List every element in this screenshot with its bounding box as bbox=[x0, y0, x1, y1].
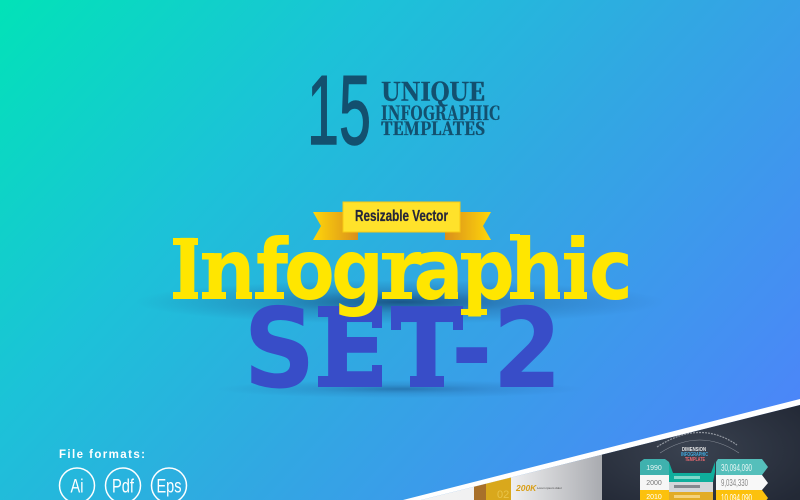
title: set-2: SET-2 bbox=[244, 284, 562, 413]
value 200k: 200K bbox=[515, 483, 537, 493]
year column: 2000 bbox=[646, 480, 662, 487]
ribbon text: Resizable Vector bbox=[355, 208, 448, 225]
white diagonal band bbox=[403, 399, 800, 500]
format badge: pdf: Pdf bbox=[112, 476, 135, 498]
shadow under infographic title bbox=[135, 280, 665, 324]
preview heading bbox=[681, 447, 708, 461]
ribbon centre bbox=[343, 202, 460, 232]
number 15: 15 bbox=[307, 55, 371, 165]
file formats block bbox=[59, 449, 186, 500]
text: templates: TEMPLATES bbox=[381, 115, 485, 141]
preview panel: light bbox=[422, 454, 602, 500]
year column: 1990 bbox=[646, 465, 662, 472]
format badge: eps: Eps bbox=[156, 476, 182, 498]
text: unique: UNIQUE bbox=[381, 74, 485, 108]
shadow under set-2 title bbox=[215, 380, 585, 398]
title: infographic: Infographic bbox=[174, 221, 633, 319]
format badge: ai: Ai bbox=[70, 476, 84, 498]
preview heading: INFOGRAPHIC bbox=[681, 452, 708, 458]
text: infographic: INFOGRAPHIC bbox=[381, 98, 500, 126]
preview panel: dark bbox=[602, 400, 800, 500]
headline: 15 unique infographic templates bbox=[307, 55, 500, 165]
value arrows bbox=[716, 459, 768, 500]
preview heading: DIMENSION bbox=[682, 447, 706, 453]
arc caption bbox=[657, 432, 739, 453]
file formats label: File formats: bbox=[59, 449, 145, 461]
ribbon right tail bbox=[445, 212, 491, 240]
preview heading: TEMPLATE bbox=[685, 457, 705, 463]
ribbon badge bbox=[313, 202, 491, 240]
small caption: Lorem ipsum dolor bbox=[537, 486, 562, 490]
value arrows: 9,034,330 bbox=[721, 478, 748, 489]
template preview bbox=[422, 405, 800, 500]
middle column bbox=[669, 462, 715, 500]
year column bbox=[640, 459, 669, 500]
ribbon left tail bbox=[313, 212, 358, 240]
value arrows: 30,094,090 bbox=[721, 463, 752, 474]
gold column bbox=[474, 484, 486, 500]
